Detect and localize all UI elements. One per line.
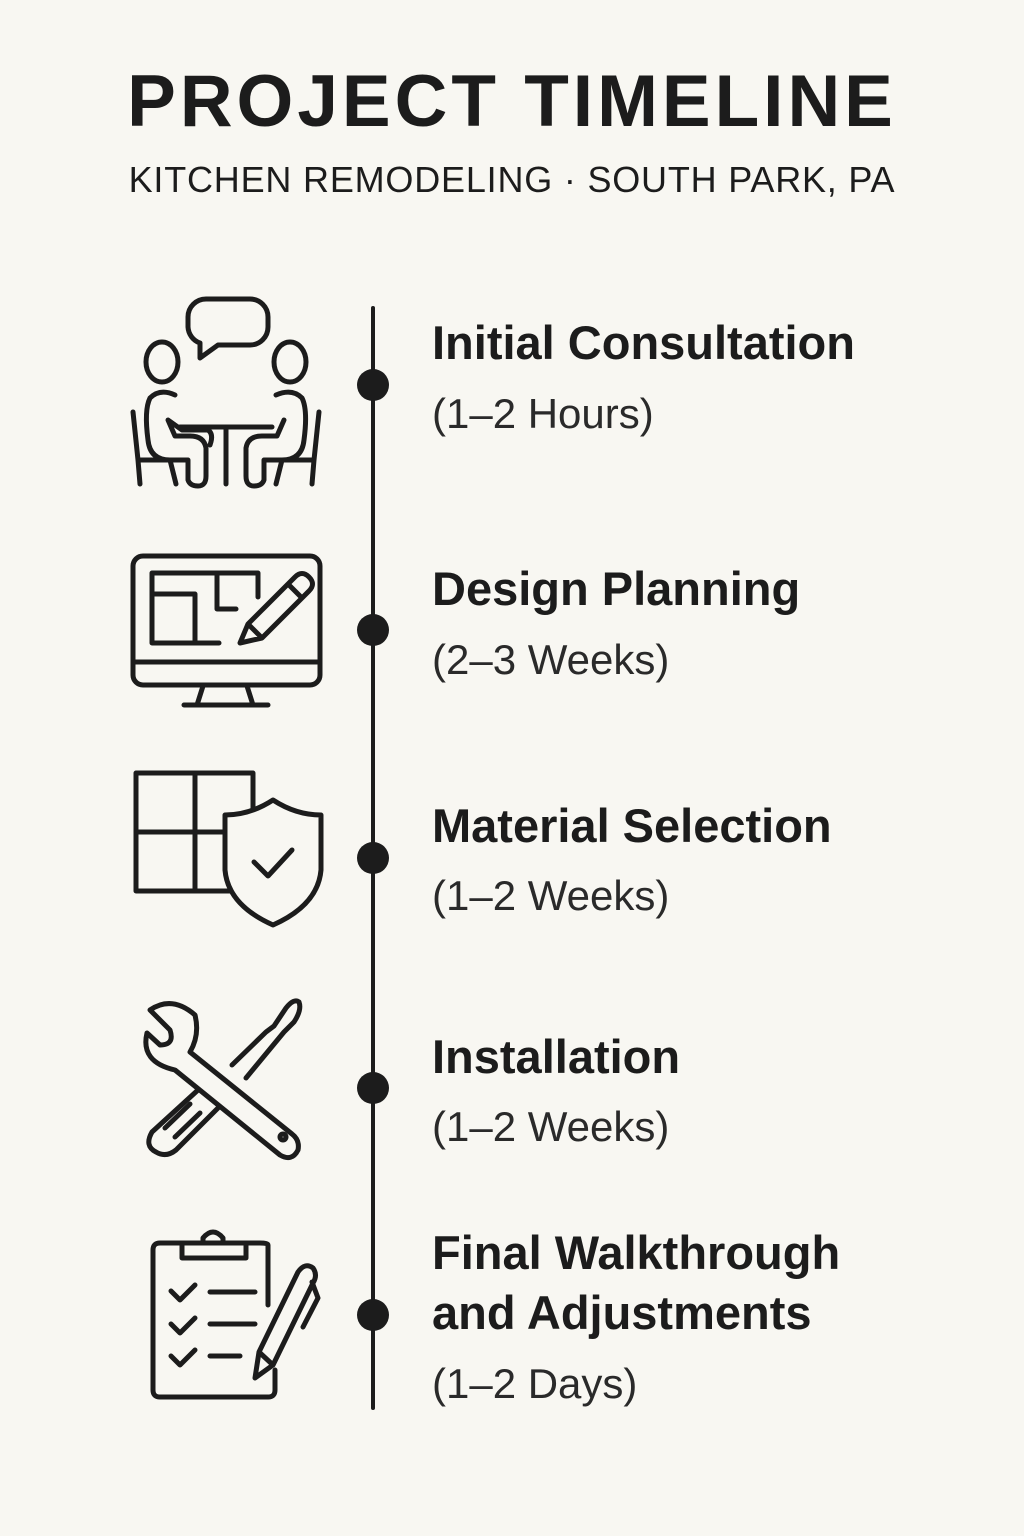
icon: installation tools bbox=[146, 1001, 300, 1158]
step 4 duration: (1–2 Weeks) bbox=[432, 1103, 669, 1150]
step 4 heading: Installation bbox=[432, 1030, 680, 1083]
title: PROJECT TIMELINE bbox=[127, 61, 897, 142]
step 3 heading: Material Selection bbox=[432, 799, 832, 852]
icon: checklist clipboard bbox=[153, 1232, 318, 1397]
subtitle: KITCHEN REMODELING · SOUTH PARK, PA bbox=[129, 159, 895, 200]
timeline line bbox=[371, 308, 375, 1408]
icon: consultation bbox=[133, 299, 319, 486]
icon: material selection bbox=[136, 773, 321, 925]
step 5 heading: and Adjustments bbox=[432, 1286, 812, 1339]
step 1 heading: Initial Consultation bbox=[432, 316, 855, 369]
step 2 duration: (2–3 Weeks) bbox=[432, 636, 669, 683]
step 5 heading bbox=[432, 1226, 840, 1339]
icon: design planning bbox=[133, 556, 320, 705]
step 3 duration: (1–2 Weeks) bbox=[432, 872, 669, 919]
step 2 heading: Design Planning bbox=[432, 562, 800, 615]
timeline dots bbox=[357, 369, 389, 1331]
step 5 heading: Final Walkthrough bbox=[432, 1226, 840, 1279]
step 1 duration: (1–2 Hours) bbox=[432, 390, 654, 437]
step 5 duration: (1–2 Days) bbox=[432, 1360, 637, 1407]
